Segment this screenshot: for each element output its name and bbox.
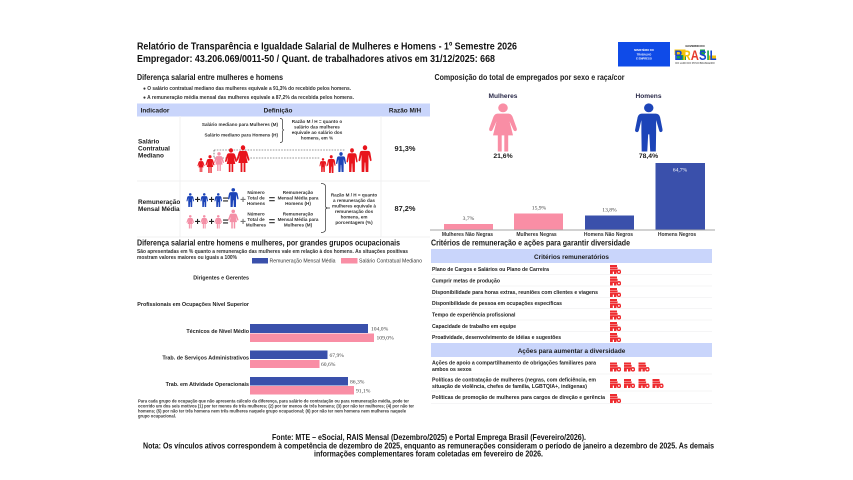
row: remuneração mensal média [138, 184, 416, 232]
brace and ratio definition: porcentagem (%) [335, 220, 373, 225]
pictogram: mulheres: 21,6% [493, 153, 513, 160]
equation text: men: Homens (H) [285, 201, 311, 206]
equation text: women: Mulheres [246, 222, 267, 228]
footer: fonte e nota: Nota: Os vínculos ativos correspondem à competência de dezembro de 2025, enquanto as remunerações consideram o período de janeiro a dezembro de 2025. As demais [143, 442, 714, 450]
logo: Ministério do Trabalho e Emprego [618, 42, 670, 66]
operators: men: = [269, 194, 275, 206]
bar chart: administrativos [250, 350, 344, 368]
table header: Razão M/H [389, 108, 422, 114]
brace and ratio definition: a remuneração das [333, 198, 375, 203]
pictogram: homens: 78,4% [639, 153, 658, 160]
logo: Ministério do Trabalho e Emprego: TRABALHO [637, 52, 651, 56]
logo: Governo do Brasil: BRASIL [674, 47, 717, 63]
footnote: ocorrido um dos seis motivos (1) por ter menos de três mulheres; (2) por ter menos de três homens; (3) por não ter mulheres; (4) por não ter [138, 404, 414, 408]
indicator label: Mediano [138, 152, 164, 160]
category labels: Trab. em Atividade Operacionais [166, 382, 249, 388]
title: Relatório de Transparência e Igualdade Salarial de Mulheres e Homens - 1º Semestre 2026 [137, 42, 517, 52]
brace and ratio definition: homens, em [341, 214, 367, 220]
criteria labels: Tempo de experiência profissional [432, 312, 516, 318]
actions labels: ambos os sexos [432, 367, 472, 373]
equation text: men: Total de [247, 196, 265, 200]
brace and ratio definition: mulheres equivale à [332, 204, 376, 208]
category labels: Profissionais em Ocupações Nível Superior [137, 302, 250, 308]
indicator label: Mensal Média [138, 206, 180, 213]
bar chart: administrativos: 67,9% [330, 353, 344, 359]
bar chart: sexo e raça/cor: 15,9% [532, 206, 547, 212]
bar chart: sexo e raça/cor [430, 163, 715, 238]
equation text: women: Remuneração [283, 212, 313, 216]
pictogram: homens [635, 93, 663, 160]
icons: men average equation [187, 188, 239, 207]
equation text: women: Mulheres (M) [284, 222, 313, 228]
bar chart: sexo e raça/cor: 3,7% [463, 216, 475, 222]
criteria labels [432, 267, 598, 341]
definition text: homens, em % [301, 136, 333, 140]
bar chart: técnicos: 109,0% [376, 336, 394, 342]
brace and ratio definition [321, 184, 377, 232]
icons: median men row [320, 145, 372, 173]
category labels: Dirigentes e Gerentes [193, 276, 249, 282]
bar chart: sexo e raça/cor: Homens Não Negros [584, 232, 633, 238]
operators: men: + [240, 195, 246, 206]
icons: median women row [198, 145, 249, 173]
definition text: Salário mediano para Mulheres (M) [202, 122, 278, 127]
heading: composição: Composição do total de empregados por sexo e raça/cor [434, 72, 625, 82]
description [137, 249, 408, 261]
category labels: Trab. de Serviços Administrativos [162, 356, 249, 362]
footer: fonte e nota: Fonte: MTE – eSocial, RAIS Mensal (Dezembro/2025) e Portal Emprega Brasil (Fevereiro/2026). [272, 433, 586, 442]
actions labels: Políticas de contratação de mulheres (negras, com deficiência, em [432, 378, 596, 384]
equation text: men: Homens [247, 201, 266, 206]
summary bullets: ● O salário contratual mediano das mulheres equivale a 91,3% do recebido pelos homens. [143, 86, 352, 92]
logo: Governo do Brasil: GOVERNO DO [685, 44, 705, 48]
bar chart: operacionais: 86,3% [350, 380, 365, 386]
heading: diferença salarial: Diferença salarial entre mulheres e homens [137, 72, 283, 82]
definition text: equivale ao salário dos [292, 130, 343, 135]
footnote: grupo ocupacional. [138, 414, 176, 418]
actions labels: Ações de apoio a compartilhamento de obrigações familiares para [432, 360, 596, 366]
icons: women average equation [187, 210, 238, 228]
criteria labels: Cumprir metas de produção [432, 278, 500, 284]
table header: critérios remuneratórios: Critérios remuneratórios [534, 254, 609, 261]
summary bullets: ● A remuneração média mensal das mulheres equivale a 87,2% da recebida pelos homens. [143, 95, 355, 101]
bar chart: sexo e raça/cor: Mulheres Não Negras [442, 232, 493, 238]
bar chart: sexo e raça/cor: 13,8% [602, 208, 617, 214]
equation text: women: Número [247, 212, 265, 216]
heading: grupos ocupacionais: Diferença salarial entre homens e mulheres, por grandes grupos ocupacionais [137, 238, 400, 248]
equation text: men: Número [247, 190, 265, 195]
operators: men: + [209, 195, 215, 206]
pictogram: homens: Homens [635, 93, 662, 100]
legend: Salário Contratual Mediano [359, 258, 422, 264]
footnote: homens; (5) por não ter três homens nem três mulheres naquele grupo ocupacional; (6) por não ter nem homens nem mulheres naquele [138, 408, 406, 414]
equation text: men [247, 190, 319, 206]
panel: critérios e ações [431, 238, 712, 404]
brace and ratio definition: remuneração dos [335, 209, 374, 214]
value 91,3%: 91,3% [395, 144, 416, 153]
operators: men: + [195, 195, 201, 206]
title: Empregador: 43.206.069/0011-50 / Quant. de trabalhadores ativos em 31/12/2025: 668 [137, 54, 495, 65]
heading: critérios: Critérios de remuneração e ações para garantir diversidade [431, 238, 630, 248]
panel: diferença salarial [137, 72, 430, 237]
actions labels: Políticas de promoção de mulheres para cargos de direção e gerência [432, 395, 605, 401]
equation text: women: Mensal Média para [278, 217, 319, 222]
indicator label: Remuneração [138, 199, 180, 206]
table header: Indicador [141, 108, 170, 114]
bar chart: técnicos: 104,0% [371, 326, 389, 332]
footer: fonte e nota: informações complementares foram coletadas em fevereiro de 2026. [314, 450, 543, 458]
equation text: men: Remuneração [283, 190, 313, 195]
footnote: Para cada grupo de ocupação que não apresenta cálculo da diferença, para salário de contratação ou para remuneração média, pode ter [138, 398, 409, 404]
logo: Ministério do Trabalho e Emprego: E EMPREGO [636, 57, 652, 61]
criteria icons [610, 265, 620, 342]
criteria labels: Disponibilidade para horas extras, reuniões com clientes e viagens [432, 290, 598, 296]
title [137, 42, 517, 65]
actions labels [432, 360, 605, 401]
actions icons [610, 362, 663, 403]
operators: women: + [195, 217, 201, 228]
bar chart: operacionais [250, 377, 371, 394]
table header: ações para aumentar a diversidade: Ações para aumentar a diversidade [518, 348, 626, 355]
indicator label: Salário [138, 138, 159, 146]
bar chart: técnicos [250, 324, 394, 342]
operators: women: + [240, 217, 246, 228]
description: São apresentadas em % quanto a remuneração das mulheres vale em relação à dos homens. As situações positivas [137, 249, 408, 255]
bar chart: sexo e raça/cor: Mulheres Negras [516, 232, 557, 238]
operators: men: = [223, 195, 229, 206]
operators: women: + [209, 217, 215, 228]
equation text: women: Total de [247, 217, 265, 222]
table header [137, 104, 430, 116]
equation text: women [246, 212, 319, 228]
panel: composição [430, 72, 715, 238]
bar chart: administrativos: 60,6% [321, 362, 336, 368]
median dashed guides [214, 150, 345, 158]
criteria labels: Plano de Cargos e Salários ou Plano de Carreira [432, 267, 549, 273]
category labels [137, 276, 250, 388]
logo: Governo do Brasil: DO LADO DO POVO BRASILEIRO [675, 62, 715, 65]
footer: fonte e nota [143, 433, 714, 458]
row: salário contratual mediano [138, 118, 416, 173]
definition text: Salário mediano para Homens (H) [204, 132, 278, 138]
criteria labels: Capacidade de trabalho em equipe [432, 324, 516, 330]
operators: women: = [269, 216, 275, 228]
table header: Definição [264, 108, 292, 114]
definition text [202, 118, 343, 142]
criteria labels: Disponibilidade de pessoa em ocupações específicas [432, 301, 562, 307]
brace and ratio definition: Razão M / H = quanto [331, 192, 377, 198]
footnote [138, 398, 414, 418]
indicator label: Contratual [138, 146, 170, 152]
description: mostram valores maiores ou iguais a 100% [137, 255, 238, 261]
category labels: Técnicos de Nível Médio [186, 329, 250, 335]
bar chart: sexo e raça/cor: 64,7% [673, 168, 688, 174]
pictogram: mulheres: Mulheres [489, 93, 518, 100]
definition text: salário das mulheres [294, 124, 340, 130]
summary bullets [143, 86, 355, 101]
panel: grupos ocupacionais [137, 238, 422, 418]
actions labels: situação de violência, chefes de família, LGBTQIA+, indígenas) [432, 384, 587, 390]
bar chart: operacionais: 91,1% [356, 388, 371, 394]
legend [252, 258, 422, 264]
bar chart: sexo e raça/cor: Homens Negros [658, 232, 696, 238]
criteria labels: Proatividade, desenvolvimento de idéias e sugestões [432, 335, 561, 341]
legend: Remuneração Mensal Média [270, 258, 336, 264]
table header: ações para aumentar a diversidade [431, 343, 712, 357]
logo: Ministério do Trabalho e Emprego: MINISTÉRIO DO [634, 47, 654, 52]
value 87,2%: 87,2% [395, 204, 416, 213]
operators: women: = [223, 217, 229, 228]
table header: critérios remuneratórios [431, 249, 712, 263]
equation text: men: Mensal Média para [278, 196, 319, 200]
pictogram: mulheres [489, 93, 518, 160]
definition text: Razão M / H = quanto o [292, 119, 342, 124]
